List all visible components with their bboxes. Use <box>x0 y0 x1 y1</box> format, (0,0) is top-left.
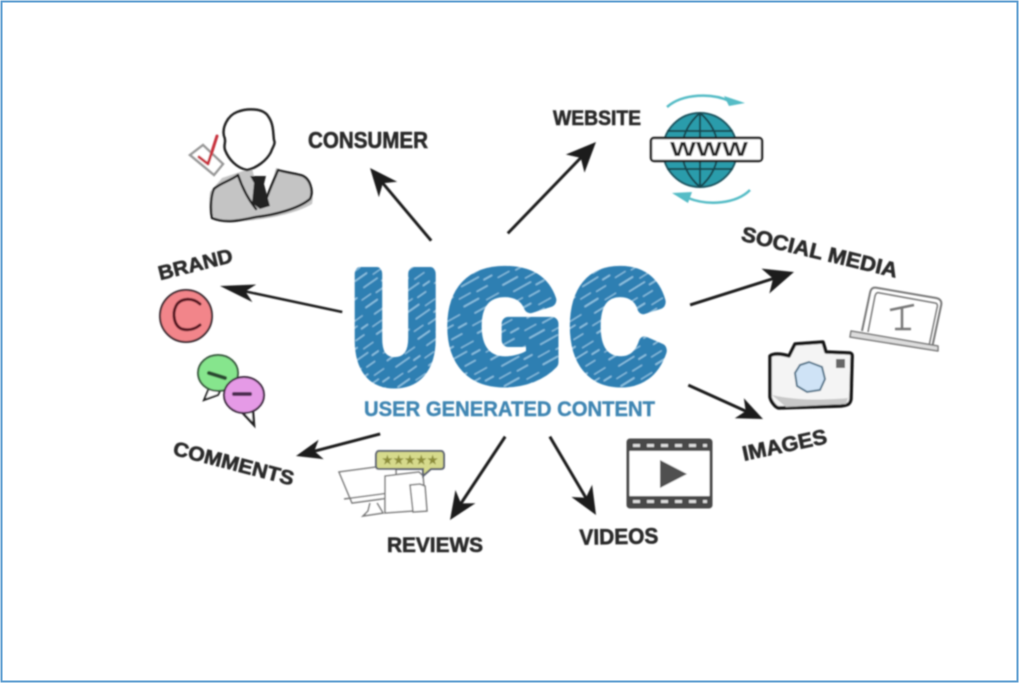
arrow: to social media <box>686 260 798 317</box>
label: reviews: REVIEWS <box>387 534 483 557</box>
label: social media: SOCIAL MEDIA <box>739 223 900 283</box>
arrow: to consumer <box>361 160 440 248</box>
label: website: WEBSITE <box>553 107 641 130</box>
icon: comment bubbles <box>198 355 264 425</box>
arrow: to website <box>498 133 605 242</box>
infographic content <box>156 96 941 557</box>
icon: video film strip <box>628 440 711 507</box>
icon: www globe: WWW <box>670 139 748 161</box>
label: videos: VIDEOS <box>579 523 659 550</box>
arrow: to images <box>684 375 768 429</box>
central title: UGC: U <box>353 240 438 413</box>
icon: copyright circle <box>160 290 212 342</box>
icon: laptop <box>850 288 941 351</box>
central title: UGC: C <box>570 241 664 411</box>
central title: UGC <box>353 240 664 413</box>
label: comments: COMMENTS <box>171 438 296 490</box>
icon: www globe <box>651 96 762 203</box>
label: brand: BRAND <box>156 245 235 285</box>
label: consumer: CONSUMER <box>308 127 428 153</box>
central title: UGC: G <box>448 243 561 412</box>
icon: consumer person with checkbox <box>190 109 313 222</box>
icon: reviews devices <box>339 451 444 516</box>
arrow: to reviews <box>440 430 515 527</box>
icon: reviews devices: ★★★★★ <box>382 453 438 467</box>
arrow: to brand <box>218 277 344 321</box>
icon: camera <box>770 342 852 408</box>
label: images: IMAGES <box>740 425 829 466</box>
subtitle: USER GENERATED CONTENT <box>364 398 655 421</box>
arrow: to comments <box>293 424 383 466</box>
arrow: to videos <box>539 431 606 521</box>
